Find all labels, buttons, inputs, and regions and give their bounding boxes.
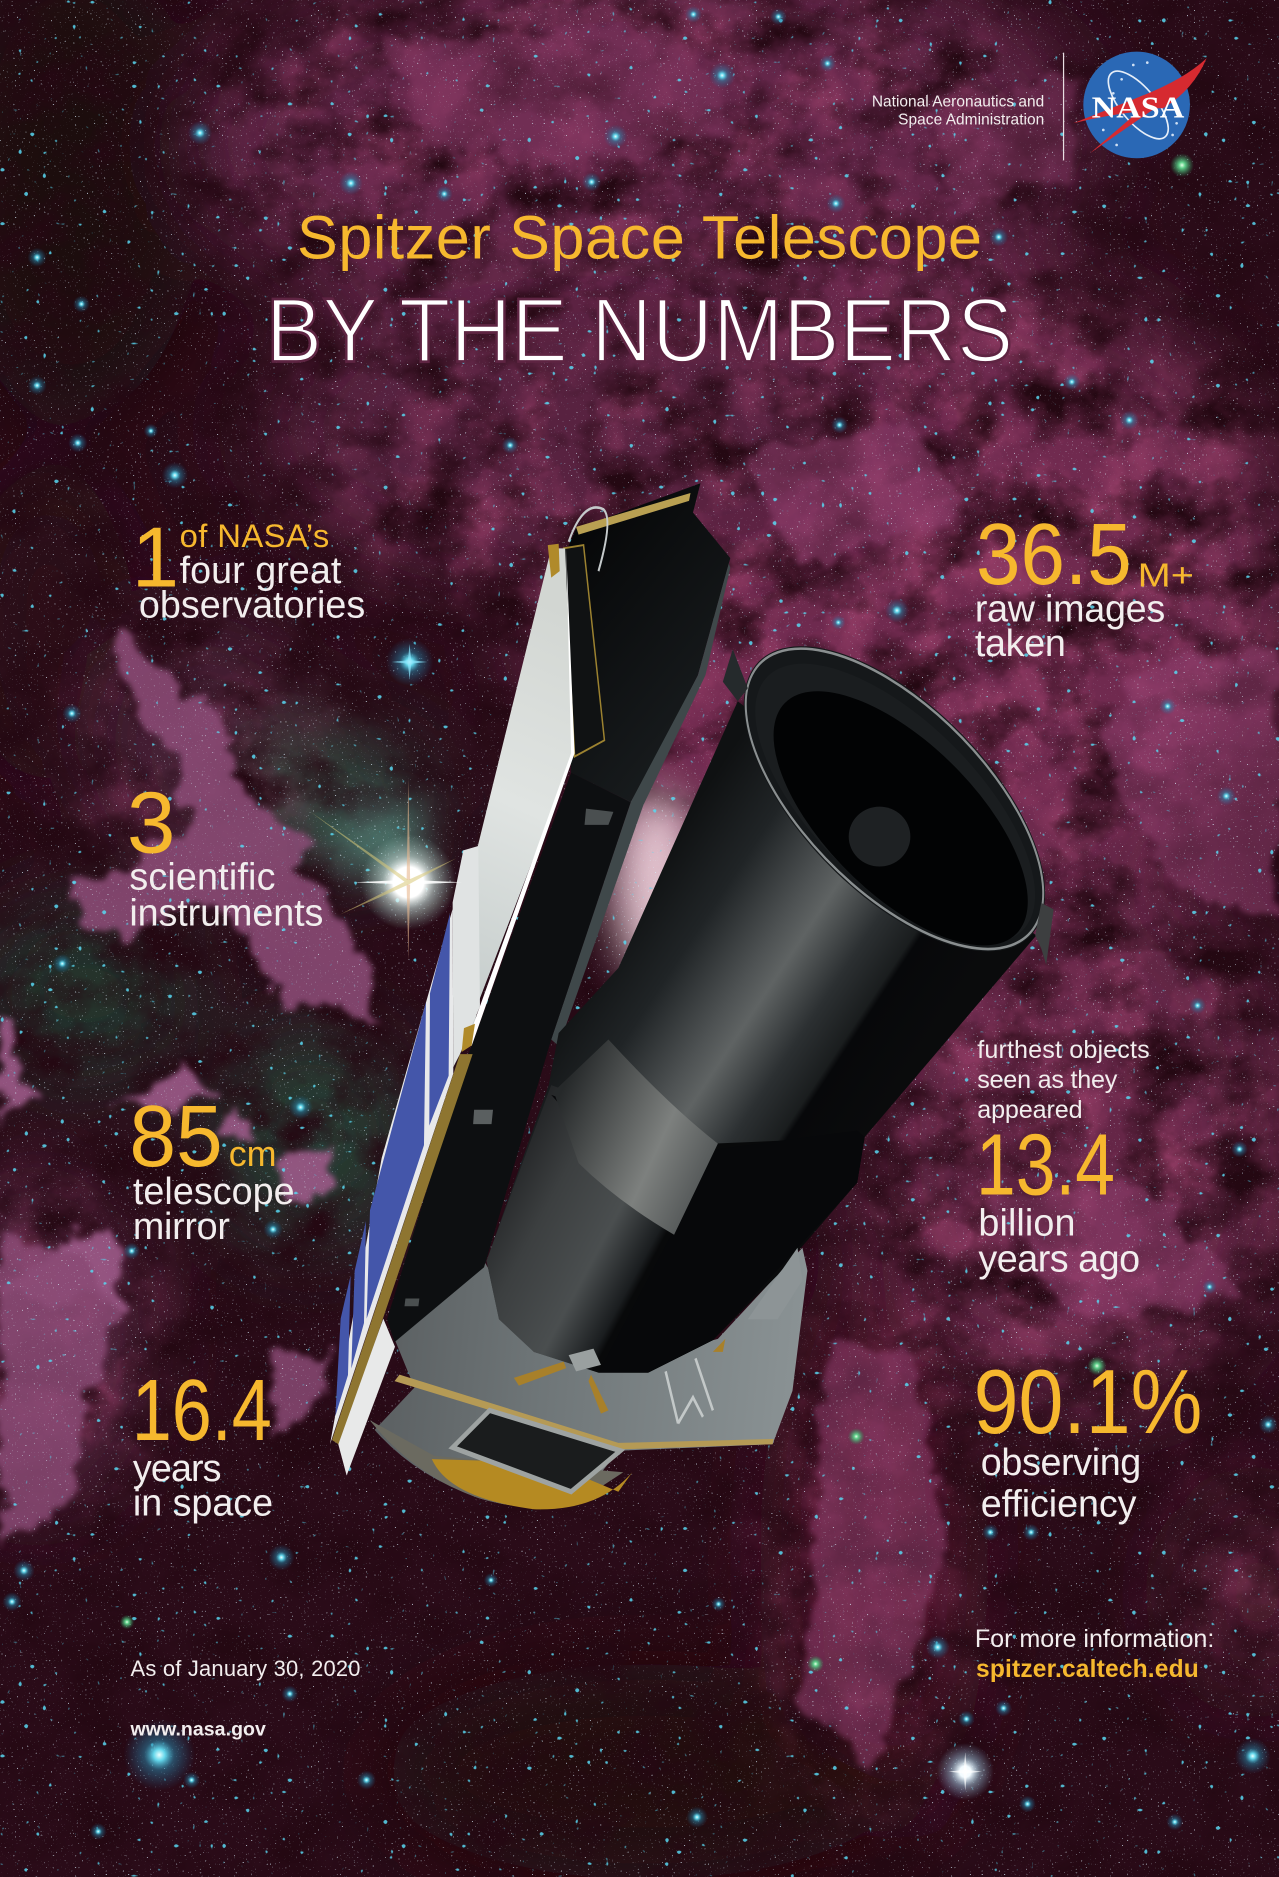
- lead-in text: furthest objects: [977, 1036, 1150, 1064]
- gold edge: [332, 1054, 473, 1445]
- panel frame strip: [453, 846, 480, 1067]
- agency name: National Aeronautics and: [872, 94, 1044, 111]
- date note: As of January 30, 2020: [131, 1656, 360, 1681]
- number 85 cm: cm: [229, 1133, 277, 1174]
- caption: efficiency: [981, 1483, 1137, 1525]
- agency name: [872, 94, 1044, 128]
- telescope body lower: [487, 1085, 865, 1373]
- stat: 90.1% observing efficiency: [974, 1352, 1202, 1525]
- link: spitzer.caltech.edu: [976, 1656, 1199, 1683]
- solar panel: [330, 846, 480, 1476]
- title: [266, 204, 1013, 382]
- caption: in space: [133, 1481, 273, 1523]
- struts and plumbing: [514, 1339, 725, 1414]
- stat: 13.4 billion years ago: [976, 1036, 1150, 1279]
- caption: years ago: [978, 1237, 1140, 1279]
- black support band: [387, 773, 631, 1342]
- stat: 1 of NASA's four great observatories: [132, 511, 365, 626]
- caption: instruments: [129, 891, 323, 933]
- caption: [981, 1441, 1141, 1525]
- caption: raw images: [975, 587, 1165, 629]
- caption: observatories: [139, 584, 365, 626]
- rim and aperture: [706, 587, 1083, 1011]
- bus equipment panel: [453, 1410, 620, 1492]
- caption: billion: [978, 1201, 1075, 1243]
- number 36.5 M+: 36.5: [976, 505, 1132, 603]
- lower white strip: [338, 1319, 395, 1476]
- caption: [139, 517, 365, 626]
- sunshade black backing: [566, 483, 730, 802]
- number 16.4: 16.4: [132, 1361, 272, 1459]
- stat: 85 cm telescope mirror: [129, 1087, 295, 1247]
- lead-in text: [977, 1036, 1150, 1124]
- caption: [133, 1170, 295, 1247]
- sun flare: [310, 778, 462, 960]
- caption: mirror: [133, 1205, 230, 1247]
- caption: taken: [975, 622, 1066, 664]
- solar cells blue: [335, 913, 450, 1416]
- stat: 36.5 M+ raw images taken: [975, 505, 1194, 664]
- lead-in text: seen as they: [977, 1066, 1118, 1094]
- stat: 16.4 years in space: [132, 1361, 273, 1523]
- caption: years: [133, 1447, 222, 1489]
- number 3: 3: [127, 773, 176, 871]
- icon: NASA meatball logo: NASA: [1092, 90, 1184, 124]
- heading: Spitzer Space Telescope: Spitzer Space Telescope: [297, 204, 982, 272]
- agency name: Space Administration: [898, 111, 1044, 128]
- NASA header: agency name and logo: [872, 52, 1207, 160]
- number 90.1%: 90.1%: [974, 1352, 1202, 1453]
- caption: [129, 855, 323, 933]
- more information: [975, 1625, 1214, 1683]
- bus base: [375, 1248, 807, 1507]
- icon: NASA meatball logo: [1073, 52, 1207, 158]
- grey band: [554, 1040, 718, 1235]
- caption: four great: [180, 549, 342, 591]
- caption: of NASA’s: [180, 517, 329, 554]
- caption: [975, 587, 1165, 664]
- caption: observing: [981, 1441, 1141, 1483]
- number 85 cm: 85: [129, 1087, 223, 1185]
- number 1: 1: [132, 511, 179, 606]
- stat: 3 scientific instruments: [127, 773, 323, 933]
- more information: For more information:: [975, 1625, 1214, 1653]
- number 36.5 M+: M+: [1138, 558, 1194, 595]
- caption: scientific: [129, 855, 275, 897]
- illustration: Spitzer telescope: [330, 483, 1083, 1509]
- solar panel white section: [472, 548, 574, 1040]
- caption: [133, 1447, 273, 1523]
- number 13.4: 13.4: [976, 1116, 1115, 1214]
- heading: By the numbers: BY THE NUMBERS: [266, 281, 1013, 382]
- number 85 cm: [129, 1087, 277, 1185]
- caption: telescope: [133, 1170, 295, 1212]
- website: www.nasa.gov: [130, 1719, 266, 1741]
- lead-in text: appeared: [977, 1096, 1083, 1124]
- caption: [978, 1201, 1140, 1279]
- telescope body upper: [487, 701, 1036, 1373]
